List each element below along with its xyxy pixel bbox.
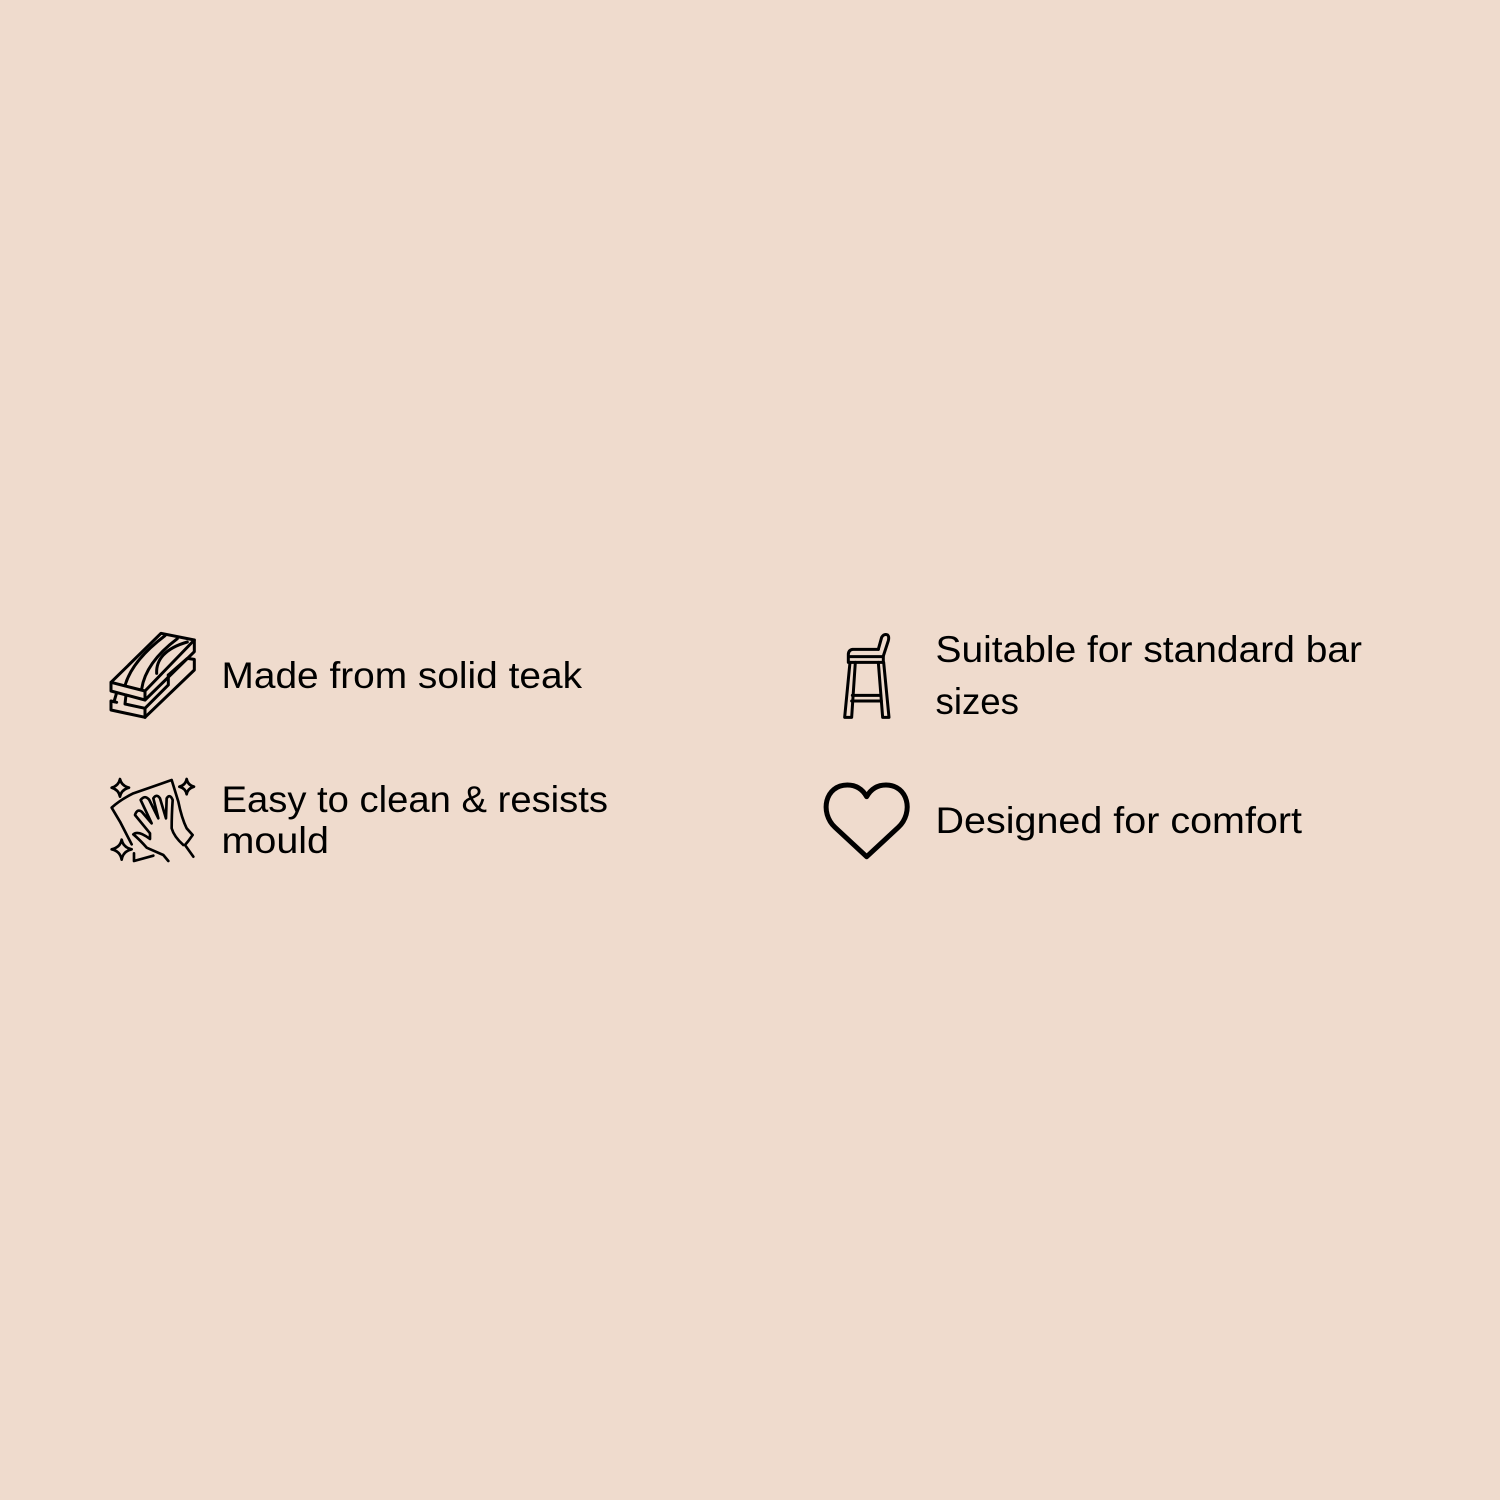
text: suitable for standard bar sizes: sizes [936, 681, 1019, 722]
text: easy to clean and resists mould [222, 779, 608, 861]
text: suitable for standard bar sizes: Suitable for standard bar [936, 629, 1362, 670]
icon: bar stool [845, 635, 889, 717]
feature: designed for comfort [826, 785, 1303, 857]
text: made from solid teak: Made from solid teak [222, 655, 583, 696]
icon: wood planks [111, 633, 194, 717]
icon: heart [826, 785, 907, 857]
text: easy to clean and resists mould: mould [222, 820, 329, 861]
feature: made from solid teak [111, 633, 583, 717]
text: easy to clean and resists mould: Easy to clean & resists [222, 779, 608, 820]
feature: suitable for standard bar sizes [845, 629, 1362, 722]
text: designed for comfort: Designed for comfort [936, 800, 1303, 841]
feature: easy to clean [112, 779, 608, 861]
icon: hand wiping with cloth [112, 779, 194, 861]
text: suitable for standard bar sizes [936, 629, 1362, 722]
